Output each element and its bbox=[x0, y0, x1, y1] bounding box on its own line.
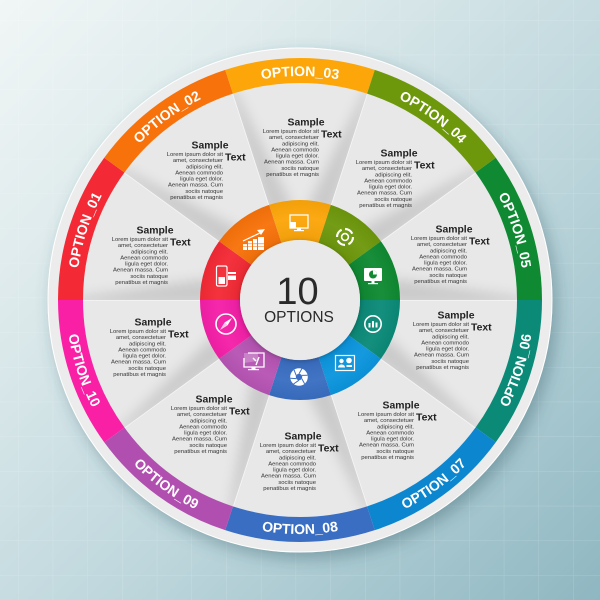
icon: compass bbox=[216, 314, 236, 334]
text block: panel 01: adipiscing elit. bbox=[131, 249, 168, 255]
inner segment 08 bbox=[259, 346, 331, 413]
text block: panel 05: Text bbox=[469, 237, 490, 248]
icon: monitor with pie bbox=[364, 268, 382, 284]
segment: option 09 bbox=[90, 423, 246, 530]
text block: panel 02: amet, consectetuer bbox=[173, 158, 223, 164]
text block: panel 01: Aenean massa. Cum bbox=[113, 268, 168, 274]
text block: panel 06: ligula eget dolor. bbox=[426, 346, 469, 352]
text block: panel 04: penatibus et magnis bbox=[359, 203, 412, 209]
text block: panel 07: Aenean massa. Cum bbox=[359, 443, 414, 449]
text block: panel 08: adipiscing elit. bbox=[279, 455, 316, 461]
text block: panel 03: Aenean commodo bbox=[271, 147, 320, 153]
text block: panel 08: ligula eget dolor. bbox=[273, 468, 316, 474]
label: OPTION_08: OPTION_08 bbox=[262, 522, 338, 536]
text block: panel 06: amet, consectetuer bbox=[419, 328, 469, 334]
text block: panel 03: Lorem ipsum dolor sit bbox=[263, 129, 319, 135]
segment: option 02 bbox=[104, 43, 242, 197]
text block: panel 09: adipiscing elit. bbox=[190, 418, 227, 424]
text block: panel 06: sociis natoque bbox=[431, 359, 470, 365]
text block: panel 01: Sample bbox=[137, 226, 174, 237]
text block: panel 09: amet, consectetuer bbox=[177, 412, 227, 418]
label: OPTION_01: OPTION_01 bbox=[69, 193, 102, 268]
text block: panel 03: Text bbox=[321, 130, 342, 141]
label: OPTION_04: OPTION_04 bbox=[400, 92, 467, 143]
text block: panel 03: Sample bbox=[288, 118, 325, 129]
text block: panel 02: sociis natoque bbox=[185, 189, 224, 195]
text block: panel 08: sociis natoque bbox=[278, 480, 317, 486]
text block: panel 04: Aenean massa. Cum bbox=[357, 191, 412, 197]
inner ring shading bbox=[200, 200, 400, 400]
inner colored ring bbox=[185, 187, 415, 413]
segment: option 06 bbox=[476, 300, 542, 442]
text block: panel 08: Aenean commodo bbox=[268, 461, 317, 467]
text block: panel 02: adipiscing elit. bbox=[186, 164, 223, 170]
text block: panel 02: Aenean massa. Cum bbox=[168, 183, 223, 189]
segment: option 05 bbox=[442, 158, 579, 312]
segment: option 07 bbox=[358, 403, 496, 557]
text block: panel 01: Lorem ipsum dolor sit bbox=[112, 237, 168, 243]
text block: panel 06: Sample bbox=[438, 311, 475, 322]
text block: panel 07: sociis natoque bbox=[376, 449, 415, 455]
text block: panel 05: adipiscing elit. bbox=[430, 248, 467, 254]
text block: panel 10: adipiscing elit. bbox=[129, 341, 166, 347]
text block: panel 01: ligula eget dolor. bbox=[125, 262, 168, 268]
text block: panel 07: ligula eget dolor. bbox=[371, 436, 414, 442]
text block: panel 06: Text bbox=[471, 323, 492, 334]
segment: option 01 bbox=[58, 158, 124, 300]
text block: panel 04: Text bbox=[414, 161, 435, 172]
label: OPTION_03: OPTION_03 bbox=[261, 66, 339, 79]
text block: panel 10: amet, consectetuer bbox=[116, 335, 166, 341]
text block: panel 10: ligula eget dolor. bbox=[123, 354, 166, 360]
text block: panel 09: sociis natoque bbox=[189, 443, 228, 449]
outer disc bbox=[48, 48, 552, 552]
text block: panel 06: penatibus et magnis bbox=[416, 365, 469, 371]
text block: panel 01: sociis natoque bbox=[130, 274, 169, 280]
text block: panel 05: Aenean massa. Cum bbox=[412, 267, 467, 273]
text block: panel 05: sociis natoque bbox=[429, 273, 468, 279]
text block: panel 04: ligula eget dolor. bbox=[369, 184, 412, 190]
text block: panel 06: Lorem ipsum dolor sit bbox=[413, 322, 469, 328]
segment: option 10 bbox=[21, 288, 158, 442]
label: OPTION_05: OPTION_05 bbox=[500, 192, 532, 268]
text block: panel 05: Lorem ipsum dolor sit bbox=[411, 236, 467, 242]
text block: panel 09: Text bbox=[229, 407, 250, 418]
text block: panel 09: ligula eget dolor. bbox=[184, 430, 227, 436]
panel base bbox=[83, 83, 517, 517]
icon: monitor with chart bbox=[290, 215, 308, 231]
text block: panel 02: Aenean commodo bbox=[175, 170, 224, 176]
inner segment 06 bbox=[349, 300, 400, 359]
inner segment 01 bbox=[200, 241, 251, 300]
text block: panel 03: amet, consectetuer bbox=[269, 135, 319, 141]
text block: panel 01: Aenean commodo bbox=[120, 255, 169, 261]
text block: panel 07: adipiscing elit. bbox=[377, 424, 414, 430]
icon: aperture bbox=[290, 368, 308, 386]
text block: panel 08 bbox=[260, 432, 339, 492]
text block: panel 04 bbox=[356, 149, 435, 209]
ring labels bbox=[69, 66, 532, 536]
icon: growth chart bbox=[243, 229, 265, 250]
text block: panel 02: Text bbox=[225, 153, 246, 164]
text block: panel 02: Lorem ipsum dolor sit bbox=[167, 152, 223, 158]
text block: panel 03: penatibus et magnis bbox=[266, 172, 319, 178]
inner segment 04 bbox=[315, 205, 387, 272]
fold shadows between panels bbox=[75, 79, 525, 521]
icon: target with bars bbox=[365, 316, 381, 332]
text block: panel 01: Text bbox=[170, 238, 191, 249]
text block: panel 10: Lorem ipsum dolor sit bbox=[110, 329, 166, 335]
text block: panel 04: amet, consectetuer bbox=[362, 166, 412, 172]
text block: panel 05: Aenean commodo bbox=[419, 254, 468, 260]
label: OPTION_07: OPTION_07 bbox=[402, 458, 464, 508]
icon: presentation board bbox=[336, 356, 354, 370]
icon: phone and card bbox=[216, 266, 236, 286]
text block: panel 04: Lorem ipsum dolor sit bbox=[356, 160, 412, 166]
text block: panel 08: Lorem ipsum dolor sit bbox=[260, 443, 316, 449]
text block: panel 02 bbox=[167, 141, 246, 201]
text block: panel 03: Aenean massa. Cum bbox=[264, 160, 319, 166]
text block: panel 09: Sample bbox=[196, 395, 233, 406]
text block: panel 08: penatibus et magnis bbox=[263, 486, 316, 492]
segment: option 04 bbox=[354, 70, 510, 177]
text block: panel 10: sociis natoque bbox=[128, 366, 167, 372]
text block: panel 03: adipiscing elit. bbox=[282, 141, 319, 147]
text block: panel 10: Aenean commodo bbox=[118, 347, 167, 353]
text block: panel 07: Text bbox=[416, 413, 437, 424]
text block: panel 05: Sample bbox=[436, 225, 473, 236]
text block: panel 04: Aenean commodo bbox=[364, 178, 413, 184]
text block: panel 03 bbox=[263, 118, 342, 178]
text block: panel 06: Aenean commodo bbox=[421, 340, 470, 346]
text block: panel 07 bbox=[358, 401, 437, 461]
inner segment 07 bbox=[305, 329, 381, 406]
inner segment 03 bbox=[269, 187, 341, 254]
text block: panel 01: amet, consectetuer bbox=[118, 243, 168, 249]
text block: panel 09 bbox=[171, 395, 250, 455]
text block: panel 06: adipiscing elit. bbox=[432, 334, 469, 340]
text block: panel 01: penatibus et magnis bbox=[115, 280, 168, 286]
text block: panel 05: amet, consectetuer bbox=[417, 242, 467, 248]
text block: panel 09: Lorem ipsum dolor sit bbox=[171, 406, 227, 412]
inner segment 02 bbox=[219, 194, 295, 271]
text block: panel 04: adipiscing elit. bbox=[375, 172, 412, 178]
text block: panel 05 bbox=[411, 225, 490, 285]
text block: panel 09: Aenean massa. Cum bbox=[172, 437, 227, 443]
inner segment 09 bbox=[213, 328, 285, 395]
text block: panel 05: ligula eget dolor. bbox=[424, 260, 467, 266]
center label: OPTIONS bbox=[264, 309, 334, 326]
text block: panel 10 bbox=[110, 318, 189, 378]
center number: 10 bbox=[276, 271, 319, 313]
inner segment 10 bbox=[185, 281, 261, 359]
text block: panel 08: amet, consectetuer bbox=[266, 449, 316, 455]
segment: option 03 bbox=[225, 26, 381, 133]
label: OPTION_06: OPTION_06 bbox=[500, 334, 531, 406]
text block: panel 01 bbox=[112, 226, 191, 286]
text block: panel 02: ligula eget dolor. bbox=[180, 176, 223, 182]
text block: panel 06 bbox=[413, 311, 492, 371]
text block: panel 09: penatibus et magnis bbox=[174, 449, 227, 455]
text block: panel 07: penatibus et magnis bbox=[361, 455, 414, 461]
text block: panel 07: Aenean commodo bbox=[366, 430, 415, 436]
text block: panel 02: penatibus et magnis bbox=[170, 195, 223, 201]
label: OPTION_09: OPTION_09 bbox=[135, 460, 198, 508]
center hub bbox=[240, 240, 360, 360]
text block: panel 08: Text bbox=[318, 444, 339, 455]
text block: panel 07: amet, consectetuer bbox=[364, 418, 414, 424]
text block: panel 07: Sample bbox=[383, 401, 420, 412]
label: OPTION_10: OPTION_10 bbox=[69, 334, 100, 406]
text block: panel 02: Sample bbox=[192, 141, 229, 152]
text block: panel 04: sociis natoque bbox=[374, 197, 413, 203]
label: OPTION_02: OPTION_02 bbox=[134, 91, 201, 142]
text block: panel 03: ligula eget dolor. bbox=[276, 154, 319, 160]
icon: circular arrows bbox=[337, 229, 353, 245]
text block: panel 08: Sample bbox=[285, 432, 322, 443]
text block: panel 10: Aenean massa. Cum bbox=[111, 360, 166, 366]
text block: panel 10: penatibus et magnis bbox=[113, 372, 166, 378]
text block: panel 08: Aenean massa. Cum bbox=[261, 474, 316, 480]
segment: option 08 bbox=[219, 467, 375, 574]
text block: panel 05: penatibus et magnis bbox=[414, 279, 467, 285]
text block: panel 07: Lorem ipsum dolor sit bbox=[358, 412, 414, 418]
icon: monitor with plant bbox=[244, 353, 264, 370]
text block: panel 09: Aenean commodo bbox=[179, 424, 228, 430]
inner segment 05 bbox=[339, 241, 415, 319]
text block: panel 10: Sample bbox=[135, 318, 172, 329]
text block: panel 04: Sample bbox=[381, 149, 418, 160]
text block: panel 10: Text bbox=[168, 330, 189, 341]
text block: panel 03: sociis natoque bbox=[281, 166, 320, 172]
text block: panel 06: Aenean massa. Cum bbox=[414, 353, 469, 359]
